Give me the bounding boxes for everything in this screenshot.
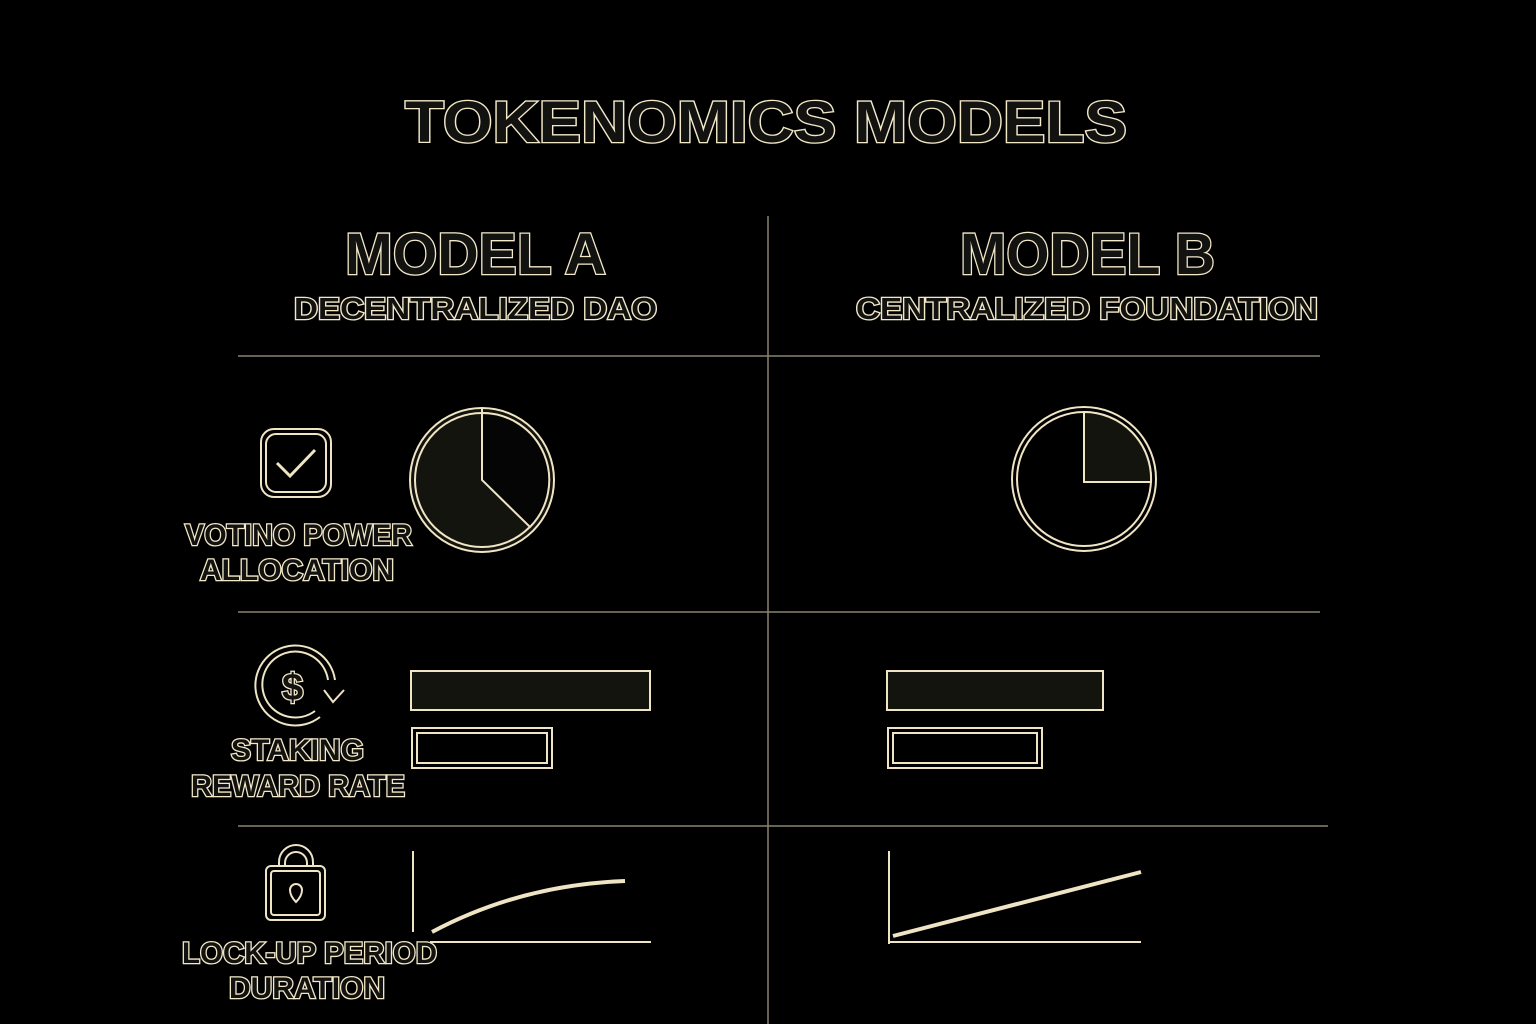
pie chart A xyxy=(410,408,554,552)
label: lock-up period duration xyxy=(182,937,437,1005)
heading: model A xyxy=(294,222,657,326)
bar chart A xyxy=(411,671,650,768)
icon: staking coin xyxy=(255,645,344,725)
line chart B xyxy=(889,851,1141,944)
heading: model A: DECENTRALIZED DAO xyxy=(294,291,657,326)
icon: lock xyxy=(266,845,325,920)
label: staking reward rate xyxy=(191,734,405,803)
icon: staking coin: $ xyxy=(282,667,303,709)
heading: model A: MODEL A xyxy=(345,222,606,287)
bar chart B xyxy=(887,671,1103,768)
label: staking reward rate: STAKING xyxy=(231,734,364,767)
label: lock-up period duration: DURATION xyxy=(229,972,385,1005)
icon: checkbox xyxy=(261,429,331,497)
heading: model B: MODEL B xyxy=(960,222,1215,287)
label: lock-up period duration: LOCK-UP PERIOD xyxy=(182,937,437,970)
heading: model B: CENTRALIZED FOUNDATION xyxy=(856,291,1318,326)
label: voting power allocation xyxy=(185,519,412,587)
line chart A xyxy=(413,851,651,942)
title: TOKENOMICS MODELS xyxy=(405,90,1127,155)
heading: model B xyxy=(856,222,1318,326)
pie chart B xyxy=(1012,407,1156,551)
label: voting power allocation: VOTINO POWER xyxy=(185,519,412,552)
label: staking reward rate: REWARD RATE xyxy=(191,770,405,803)
label: voting power allocation: ALLOCATION xyxy=(200,554,394,587)
